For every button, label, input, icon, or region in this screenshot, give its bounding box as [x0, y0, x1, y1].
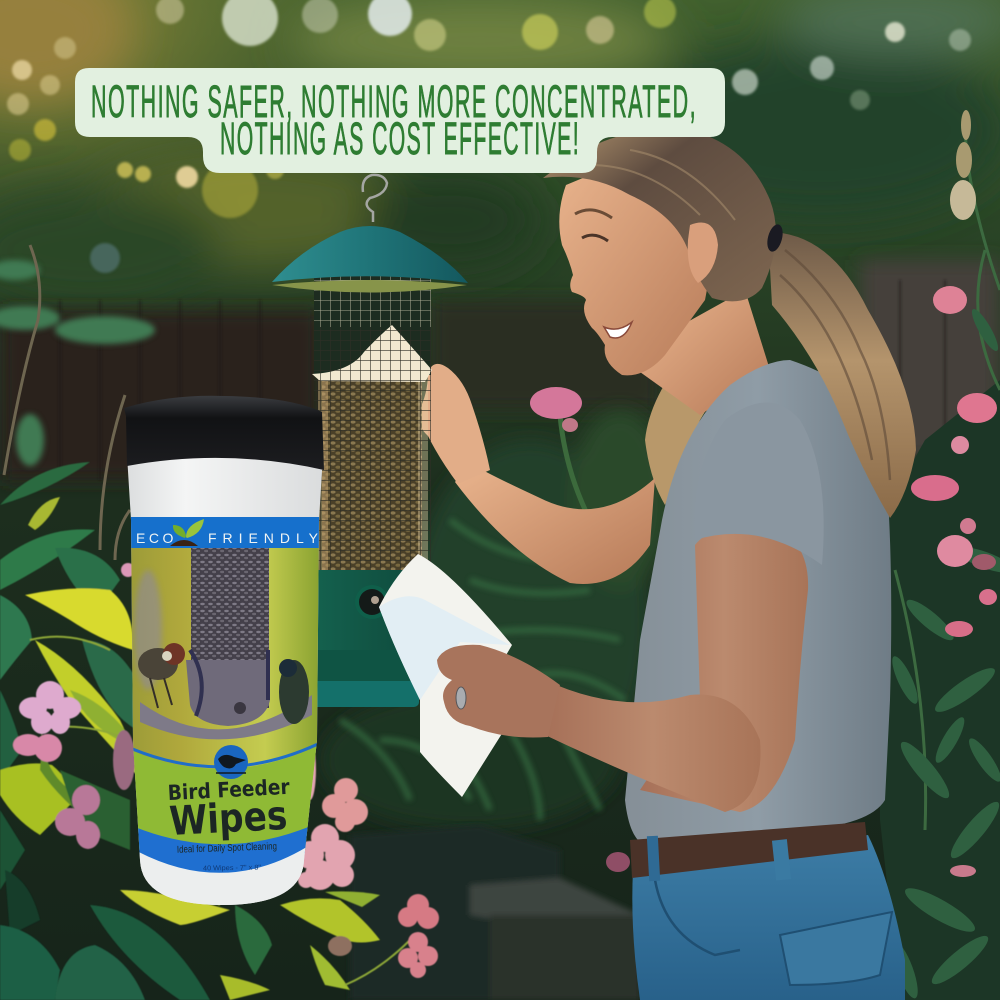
green label [130, 745, 320, 850]
upper blue band [125, 517, 325, 548]
pink blooms [911, 286, 997, 877]
bokeh lights [7, 0, 971, 273]
black lid [124, 396, 324, 470]
wipe cloth [379, 554, 512, 797]
goldfinch [138, 648, 178, 680]
blue tit [279, 660, 309, 724]
spire buds [950, 110, 976, 220]
belt [630, 822, 868, 878]
ear [688, 222, 718, 283]
near hand [437, 645, 560, 738]
eco friendly text: FRIENDLY [208, 530, 319, 546]
near forearm [545, 680, 761, 812]
right flowering plants [880, 110, 1000, 1000]
upper foliage [0, 0, 1000, 310]
leaf logo [170, 519, 204, 546]
lower blue band [138, 827, 308, 873]
neck [640, 290, 770, 415]
hook [363, 175, 387, 222]
left background foliage [0, 260, 155, 466]
eye [582, 235, 608, 241]
face [559, 150, 720, 375]
product name: Ideal for Daily Spot Cleaning [177, 841, 277, 856]
far arm [455, 463, 655, 584]
shirt [625, 360, 891, 846]
lower foliage [320, 410, 670, 830]
white cone [312, 325, 432, 382]
hair tie [765, 223, 785, 253]
bench [350, 825, 640, 1000]
pink flowers left [13, 563, 135, 849]
hair cap [543, 128, 776, 301]
fern fronds [340, 520, 625, 820]
background pink flower [530, 387, 630, 872]
ponytail [768, 232, 916, 518]
blonde strands by neck [645, 350, 730, 505]
product name [167, 775, 291, 872]
headline text: NOTHING AS COST EFFECTIVE! [220, 113, 580, 164]
jeans [632, 835, 905, 1000]
product canister [124, 396, 325, 910]
headline text [91, 76, 697, 164]
white base highlight [140, 848, 306, 905]
sleeve [694, 402, 824, 565]
stems left [4, 245, 130, 560]
woman [418, 128, 916, 1000]
eco friendly text [136, 530, 319, 546]
product name: 40 Wipes - 7" x 8" [203, 864, 262, 872]
bird badge [214, 745, 248, 779]
dark foliage [880, 380, 1000, 1000]
eco friendly text: ECO [136, 530, 177, 546]
cage interior [314, 272, 431, 375]
dome [272, 280, 467, 292]
headline banner [75, 68, 725, 173]
product name: Bird Feeder [167, 775, 291, 805]
product photo [125, 545, 325, 780]
seed tube [322, 375, 422, 570]
banner shape [75, 68, 725, 173]
pink flowers centre [296, 740, 439, 978]
wooden fence [0, 260, 1000, 480]
mesh cage [314, 272, 431, 570]
white body [127, 455, 323, 905]
smile [604, 322, 632, 338]
feeder body base [315, 570, 420, 652]
ring [456, 687, 466, 709]
near upper arm [640, 524, 808, 812]
bird feeder [272, 175, 468, 707]
left leaves and flowers [0, 462, 439, 1000]
feeding port [355, 585, 389, 619]
far hand [418, 364, 490, 484]
sunlit leaves [0, 497, 137, 850]
product name: Wipes [168, 793, 288, 845]
